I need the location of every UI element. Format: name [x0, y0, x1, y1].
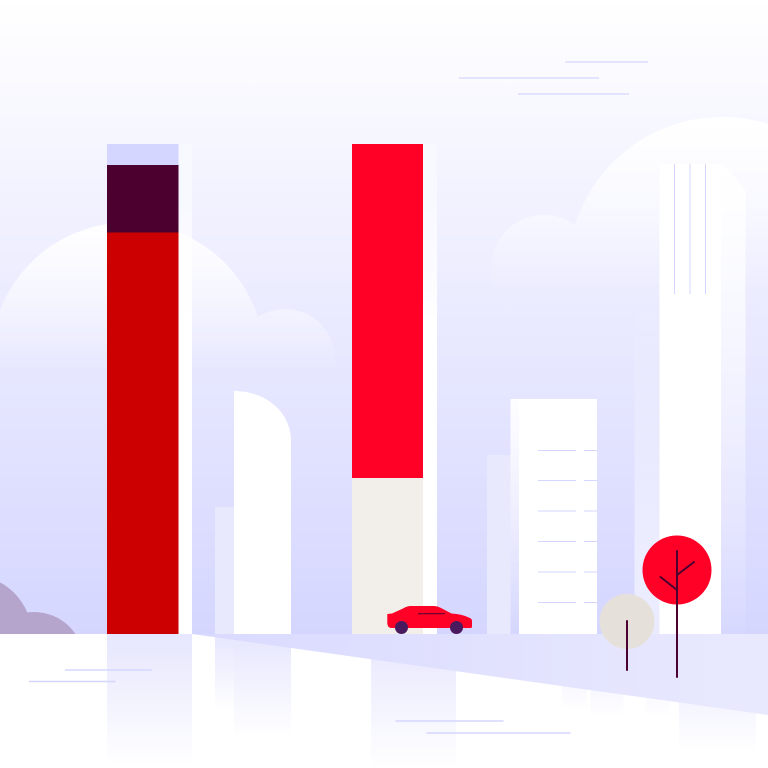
road [192, 634, 768, 715]
bush: purple [0, 582, 76, 634]
building: office block [487, 399, 597, 634]
window lines [538, 450, 597, 602]
building: rounded white [215, 391, 291, 634]
bar 2: stacked [352, 144, 437, 634]
icon: red tree [642, 536, 712, 677]
tower lines [674, 164, 706, 294]
sky lines [459, 62, 648, 94]
cloud: right [492, 117, 768, 300]
icon: red car [387, 606, 472, 634]
ground lines [30, 670, 570, 733]
ground [0, 634, 768, 768]
bar 1: stacked [107, 144, 192, 634]
cloud: left [0, 222, 335, 380]
reflections [107, 634, 756, 768]
icon: beige tree [600, 594, 654, 670]
building: tall tower [634, 164, 746, 634]
